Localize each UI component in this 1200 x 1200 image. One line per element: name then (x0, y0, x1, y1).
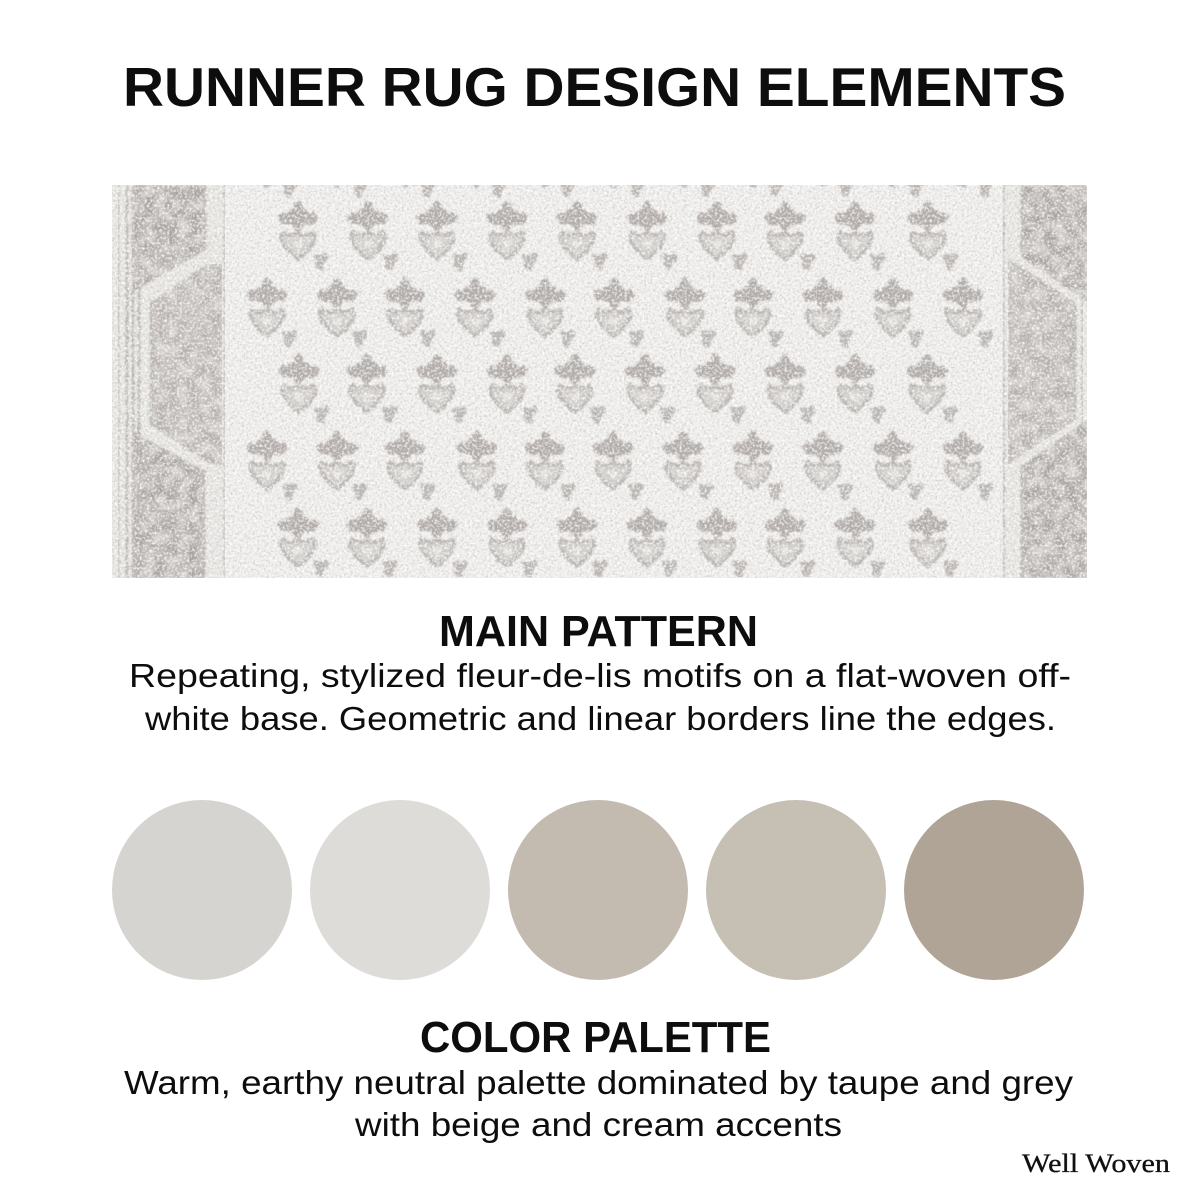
color palette description: Warm, earthy neutral palette dominated by taupe and grey (124, 1064, 1074, 1101)
left border mottling (133, 185, 205, 578)
main pattern description (129, 657, 1071, 737)
swatch 3 (508, 800, 688, 980)
main pattern description: Repeating, stylized fleur-de-lis motifs on a flat-woven off- (129, 657, 1071, 694)
right border lines (1003, 185, 1083, 578)
heading: main pattern: MAIN PATTERN (439, 607, 758, 656)
left border lines (118, 185, 225, 578)
swatch 2 (310, 800, 490, 980)
fleur-de-lis motif field (246, 127, 993, 577)
color palette description (124, 1064, 1074, 1143)
heading: color palette: COLOR PALETTE (420, 1013, 771, 1062)
left border panel fills (133, 185, 222, 578)
left border (112, 185, 225, 578)
woven grain texture (112, 185, 1087, 578)
swatch 5 (904, 800, 1084, 980)
title: RUNNER RUG DESIGN ELEMENTS (123, 56, 1066, 118)
right medallion mottling (1008, 258, 1075, 464)
left medallion mottling (151, 264, 222, 466)
brand wordmark: Well Woven (1022, 1149, 1170, 1178)
main pattern description: white base. Geometric and linear borders line the edges. (144, 700, 1056, 737)
woven highlights (112, 185, 1087, 578)
rug image panel (112, 127, 1087, 578)
color palette swatches (112, 800, 1084, 980)
right border panel fills (1008, 185, 1087, 578)
right border (1002, 185, 1087, 578)
swatch 1 (112, 800, 292, 980)
swatch 4 (706, 800, 886, 980)
right border mottling (1022, 185, 1087, 578)
rug pattern artwork (112, 185, 1087, 578)
color palette description: with beige and cream accents (354, 1106, 842, 1143)
